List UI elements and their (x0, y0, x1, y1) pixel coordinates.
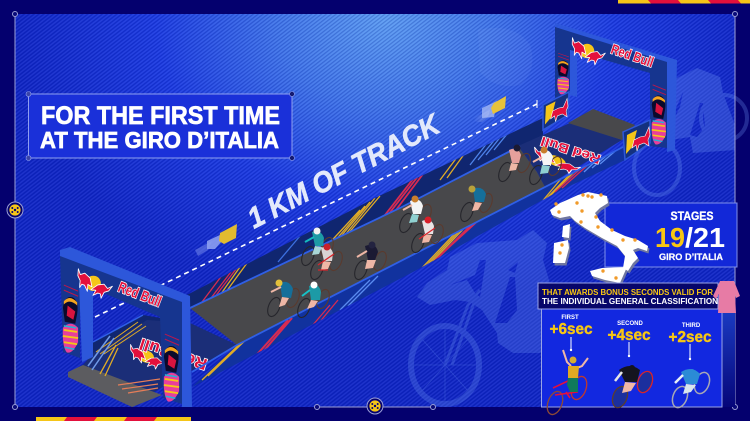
ghost cyclist: large bottom centre (411, 230, 560, 404)
panel: stages: /21 (685, 222, 725, 253)
near finish mat: Red Bull (138, 334, 210, 372)
panel: stages: GIRO D’ITALIA (659, 252, 723, 263)
first place pointer (570, 337, 572, 351)
decorative top-right stripes (618, 0, 750, 4)
cyclists on the track (265, 144, 564, 319)
frame line: left (12, 12, 18, 410)
title box: AT THE GIRO D’ITALIA (40, 127, 279, 153)
cyclist 7 (409, 216, 446, 254)
ghost cyclist: upper centre (478, 28, 532, 86)
cyclist 3 (299, 228, 336, 267)
second place label: SECOND (617, 321, 644, 327)
dashed track-length line (95, 100, 537, 317)
icon: wheel emblem left (7, 202, 23, 218)
strip behind bonus panel (722, 309, 735, 407)
first place cyclist arms raised (544, 350, 590, 417)
far finish mat (518, 109, 635, 187)
bonus header banner (538, 283, 718, 309)
frame line: right (732, 12, 738, 410)
ghost cyclist: right of far gate (634, 68, 747, 195)
cyclist 4 (308, 244, 345, 281)
cyclist 6 (397, 196, 434, 234)
panel: stages: STAGES (670, 209, 714, 223)
map of Italy with stage dots (550, 192, 650, 286)
cyclist 8 (458, 186, 495, 223)
track back wall (183, 106, 543, 308)
track road surface (190, 146, 545, 345)
track front wall (192, 142, 626, 387)
heading: 1 km of track: 1 KM OF TRACK (242, 108, 447, 235)
cyclist 5 (352, 242, 389, 281)
panel: bonus seconds (542, 309, 722, 417)
first place label: FIRST (561, 315, 579, 321)
cyclist 1 (265, 280, 302, 318)
first place bonus: +6sec (550, 321, 593, 338)
third place cyclist (670, 369, 712, 410)
near finish gate (60, 247, 192, 407)
panel: stages (605, 203, 737, 267)
third place bonus: +2sec (668, 329, 712, 346)
third place pointer (689, 344, 691, 360)
wall top edges (190, 146, 623, 372)
far finish mat: Red Bull (539, 134, 602, 167)
near finish gate: Red Bull (116, 279, 164, 311)
decorative bottom-left stripes (36, 417, 191, 421)
near finish mat (68, 315, 237, 407)
panel: stages: 19 (655, 222, 685, 253)
bonus header banner: THAT AWARDS BONUS SECONDS VALID FOR (542, 288, 713, 297)
second place pointer (628, 342, 630, 357)
far start gate: Red Bull (609, 41, 656, 70)
third place label: THIRD (682, 323, 701, 329)
cyclist 10 (527, 146, 564, 186)
icon: wheel emblem bottom (367, 398, 383, 414)
cyclist 2 (295, 282, 332, 319)
title box: FOR THE FIRST TIME (41, 102, 280, 130)
icon: pink jersey (713, 281, 740, 313)
frame line: bottom (314, 404, 436, 410)
bonus header banner: THE INDIVIDUAL GENERAL CLASSIFICATION (542, 297, 718, 306)
second place cyclist (610, 365, 655, 410)
arrow: far direction chevron (473, 96, 506, 122)
second place bonus: +4sec (608, 327, 651, 344)
far start gate (543, 23, 677, 160)
title box (26, 92, 294, 160)
cyclist 9 (496, 144, 533, 183)
arrow: near direction chevron (195, 224, 237, 256)
